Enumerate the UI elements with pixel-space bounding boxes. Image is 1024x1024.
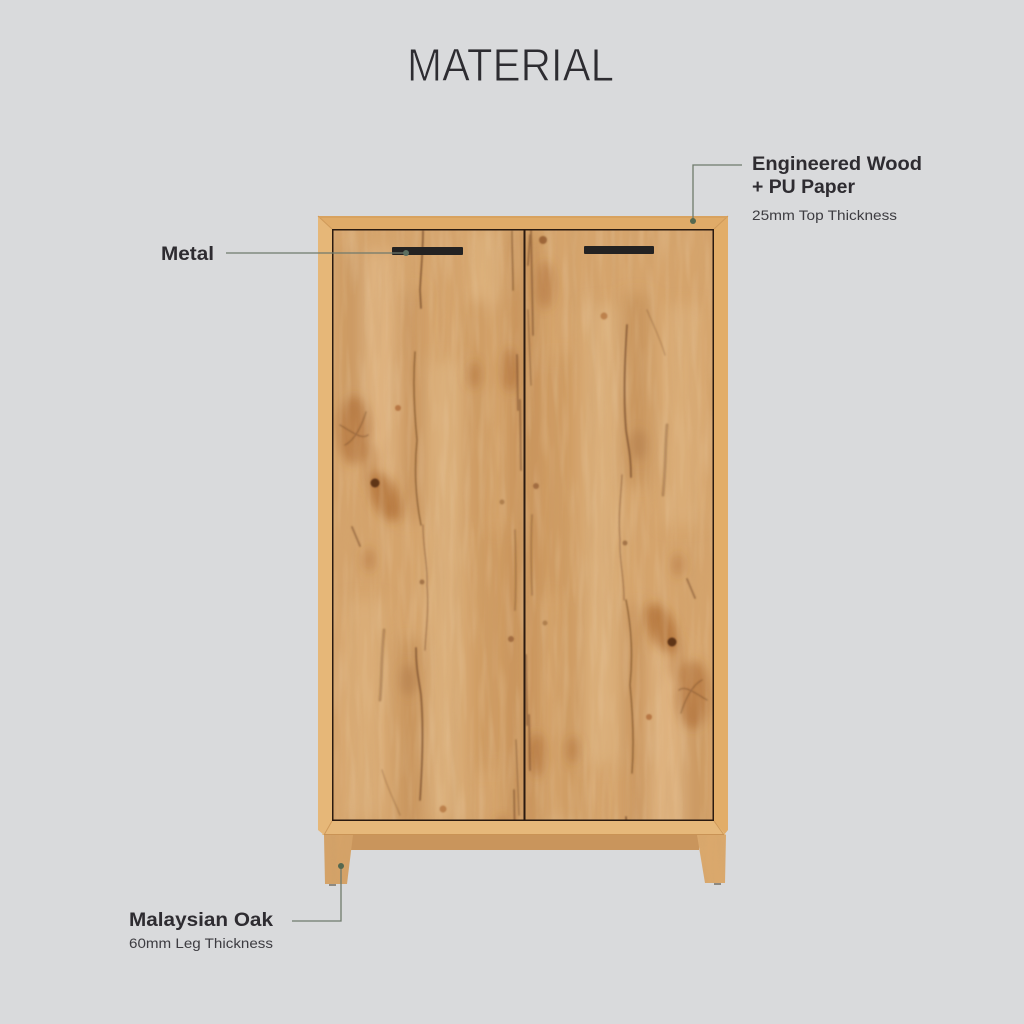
left door: [334, 230, 524, 820]
callout: metal: Metal: [161, 244, 214, 265]
inner cavity line: [332, 229, 714, 821]
callout: engineered wood: 25mm Top Thickness: [752, 207, 897, 223]
callout: malaysian oak: 60mm Leg Thickness: [129, 935, 273, 951]
cabinet: [318, 216, 730, 905]
right door: [526, 230, 712, 820]
callout: engineered wood: + PU Paper: [752, 177, 856, 198]
right handle: [584, 246, 654, 254]
callout: malaysian oak: Malaysian Oak: [129, 910, 273, 931]
callout: metal: [161, 244, 409, 265]
outer frame: [318, 216, 728, 835]
callout: malaysian oak: [129, 863, 344, 951]
left handle: [392, 247, 463, 255]
title: MATERIAL: [407, 39, 614, 91]
callout: engineered wood: Engineered Wood: [752, 154, 922, 175]
callout: engineered wood: [690, 154, 922, 224]
cabinet legs and apron: [324, 835, 726, 886]
